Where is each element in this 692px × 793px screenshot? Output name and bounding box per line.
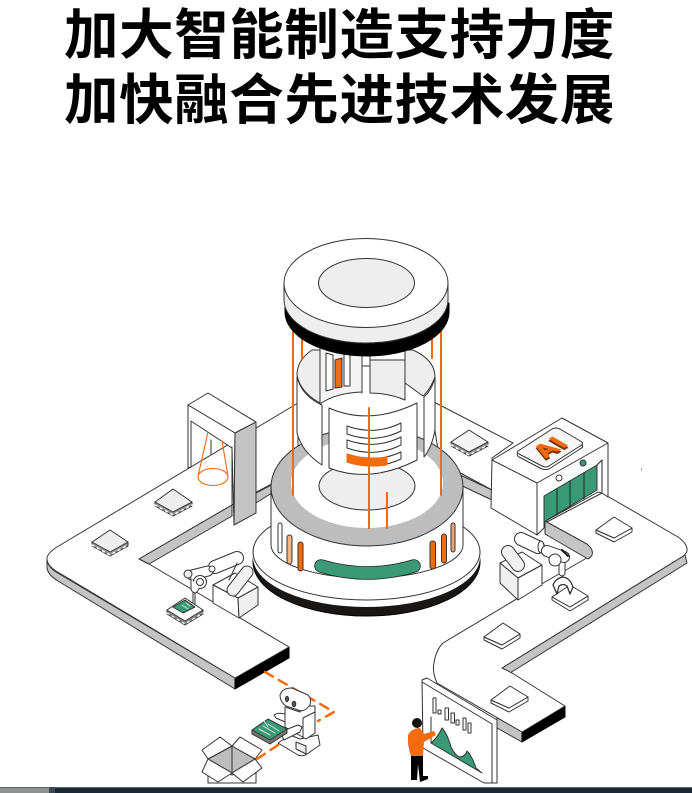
right curved panel <box>424 377 435 457</box>
gripper <box>553 577 573 594</box>
robot body <box>285 706 315 739</box>
chip: lower conveyor 2 <box>491 686 528 712</box>
rear panels of cylinder <box>297 345 435 404</box>
orange dashed route <box>257 672 334 759</box>
chip: lower conveyor 1 <box>484 623 520 649</box>
chart board <box>422 678 497 783</box>
AI plate: AI <box>527 433 576 461</box>
left conveyor belt <box>47 403 298 689</box>
AI plate <box>517 428 583 470</box>
green doors <box>544 460 602 522</box>
left curved panel <box>297 377 322 465</box>
title: 加快融合先进技术发展 <box>64 70 615 131</box>
bars <box>433 698 471 733</box>
small mark <box>641 468 642 471</box>
open cardboard box <box>202 737 262 783</box>
right conveyor belt, upper <box>430 400 513 500</box>
middle drum <box>271 428 463 578</box>
area peaks <box>431 728 482 773</box>
AI machine <box>491 418 608 535</box>
title <box>64 5 615 131</box>
AI plate: AI <box>527 435 576 463</box>
chip: rear right conveyor <box>451 430 488 456</box>
robot arm left <box>184 558 258 618</box>
robot head <box>280 688 311 711</box>
front screen panel <box>329 403 417 474</box>
orange rods <box>293 330 441 528</box>
robot front arm <box>280 725 302 740</box>
robot back arm <box>274 713 285 722</box>
chip with green circuit board <box>167 598 203 625</box>
drum vents and green display <box>278 523 455 573</box>
robot arm right <box>500 539 588 611</box>
assembly robot <box>252 688 320 756</box>
person <box>408 718 436 782</box>
robot base <box>278 735 320 756</box>
chip: right conveyor plain <box>596 517 632 542</box>
gate scanner <box>188 393 256 525</box>
top disc <box>284 238 449 356</box>
title: 加大智能制造支持力度 <box>64 5 615 66</box>
central tower <box>253 238 480 616</box>
base disc <box>253 504 480 616</box>
chip: left conveyor 1 <box>155 489 192 516</box>
scan cone <box>198 432 228 486</box>
bottom window strip <box>0 787 692 793</box>
green circuit board <box>252 719 287 744</box>
chip: left conveyor 2 <box>92 530 128 556</box>
chips on conveyors <box>92 430 632 712</box>
chip under gripper <box>552 585 588 611</box>
right conveyor belt, lower <box>433 493 687 742</box>
